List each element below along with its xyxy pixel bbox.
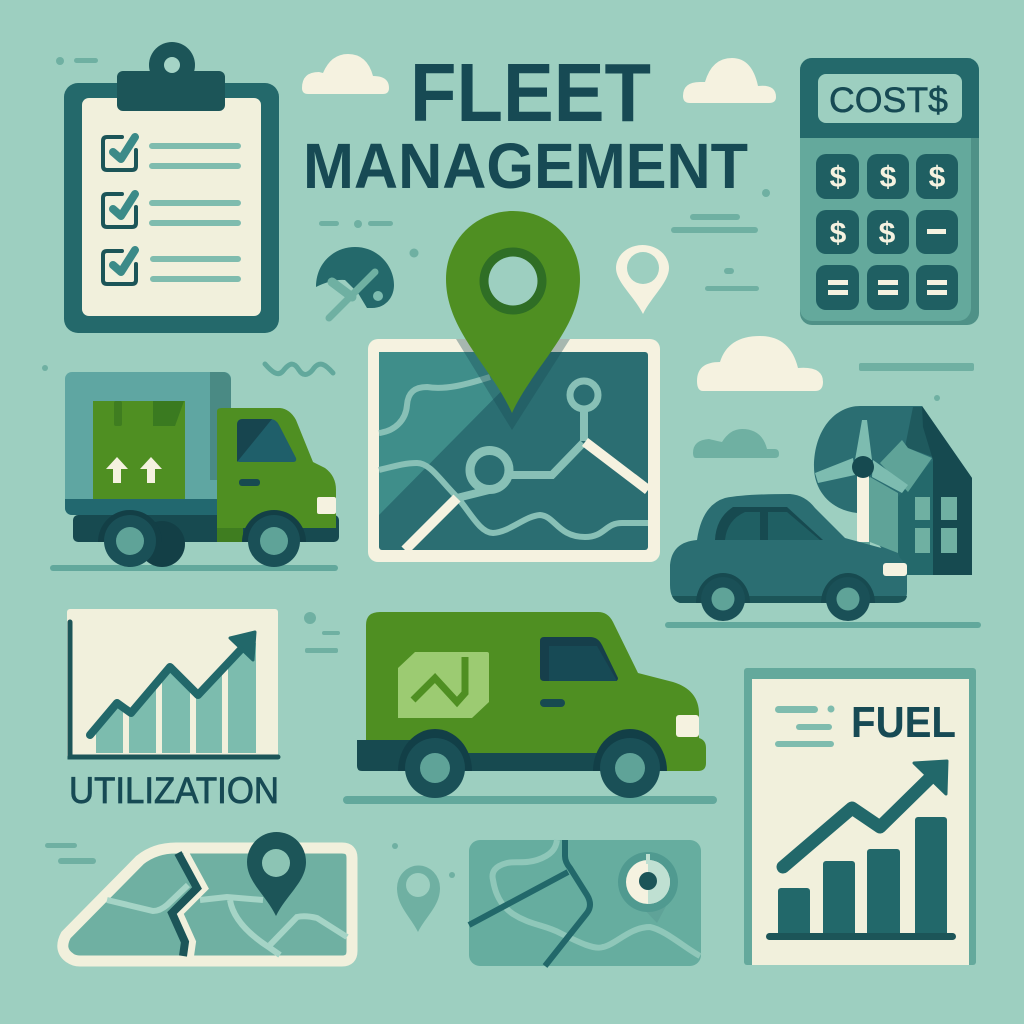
decorative cloud: right small	[693, 429, 779, 458]
title: MANAGEMENT	[303, 130, 748, 202]
calculator display	[818, 74, 962, 123]
decorative cloud: title right	[683, 58, 776, 103]
van logo	[398, 652, 489, 718]
label: utilization: UTILIZATION	[69, 770, 279, 811]
panel: clipboard checklist	[64, 42, 279, 333]
title: FLEET	[410, 46, 651, 139]
panel: cost calculator: $	[929, 161, 946, 194]
panel: cost calculator	[800, 58, 979, 325]
panel: cost calculator: $	[880, 161, 897, 194]
icon: wind turbine and building	[814, 406, 972, 575]
icon: gauge	[316, 247, 394, 318]
icon: delivery van	[343, 612, 717, 804]
pin shadow	[456, 339, 570, 430]
icon: small location pin	[616, 245, 669, 314]
chart: utilization	[67, 609, 279, 811]
decorative clouds: title left	[302, 54, 389, 94]
decorative squiggle	[265, 364, 333, 374]
decorative dots and dashes	[42, 57, 940, 878]
icon: outline pin	[397, 865, 440, 932]
panel: bottom left map	[63, 832, 352, 961]
route line	[405, 442, 648, 550]
checklist rows	[103, 137, 238, 284]
icon: car	[665, 494, 981, 628]
panel: cost calculator: $	[830, 217, 847, 250]
panel: fuel chart	[744, 668, 976, 965]
panel: bottom right map	[469, 840, 701, 966]
cargo box	[93, 401, 185, 499]
calculator keys	[816, 154, 958, 310]
icon: clipboard clip	[117, 42, 225, 111]
van window	[540, 637, 618, 681]
icon: target	[618, 852, 678, 923]
icon: main location pin	[446, 211, 580, 413]
panel: cost calculator: COST$	[829, 81, 948, 120]
panel: cost calculator: $	[830, 161, 847, 194]
panel: cost calculator: $	[879, 217, 896, 250]
title	[303, 46, 748, 202]
icon: delivery truck	[50, 372, 339, 571]
label: fuel: FUEL	[851, 698, 956, 747]
decorative cloud: right large	[697, 336, 823, 391]
panel: route map	[368, 339, 660, 562]
icon: map pin	[247, 832, 306, 916]
